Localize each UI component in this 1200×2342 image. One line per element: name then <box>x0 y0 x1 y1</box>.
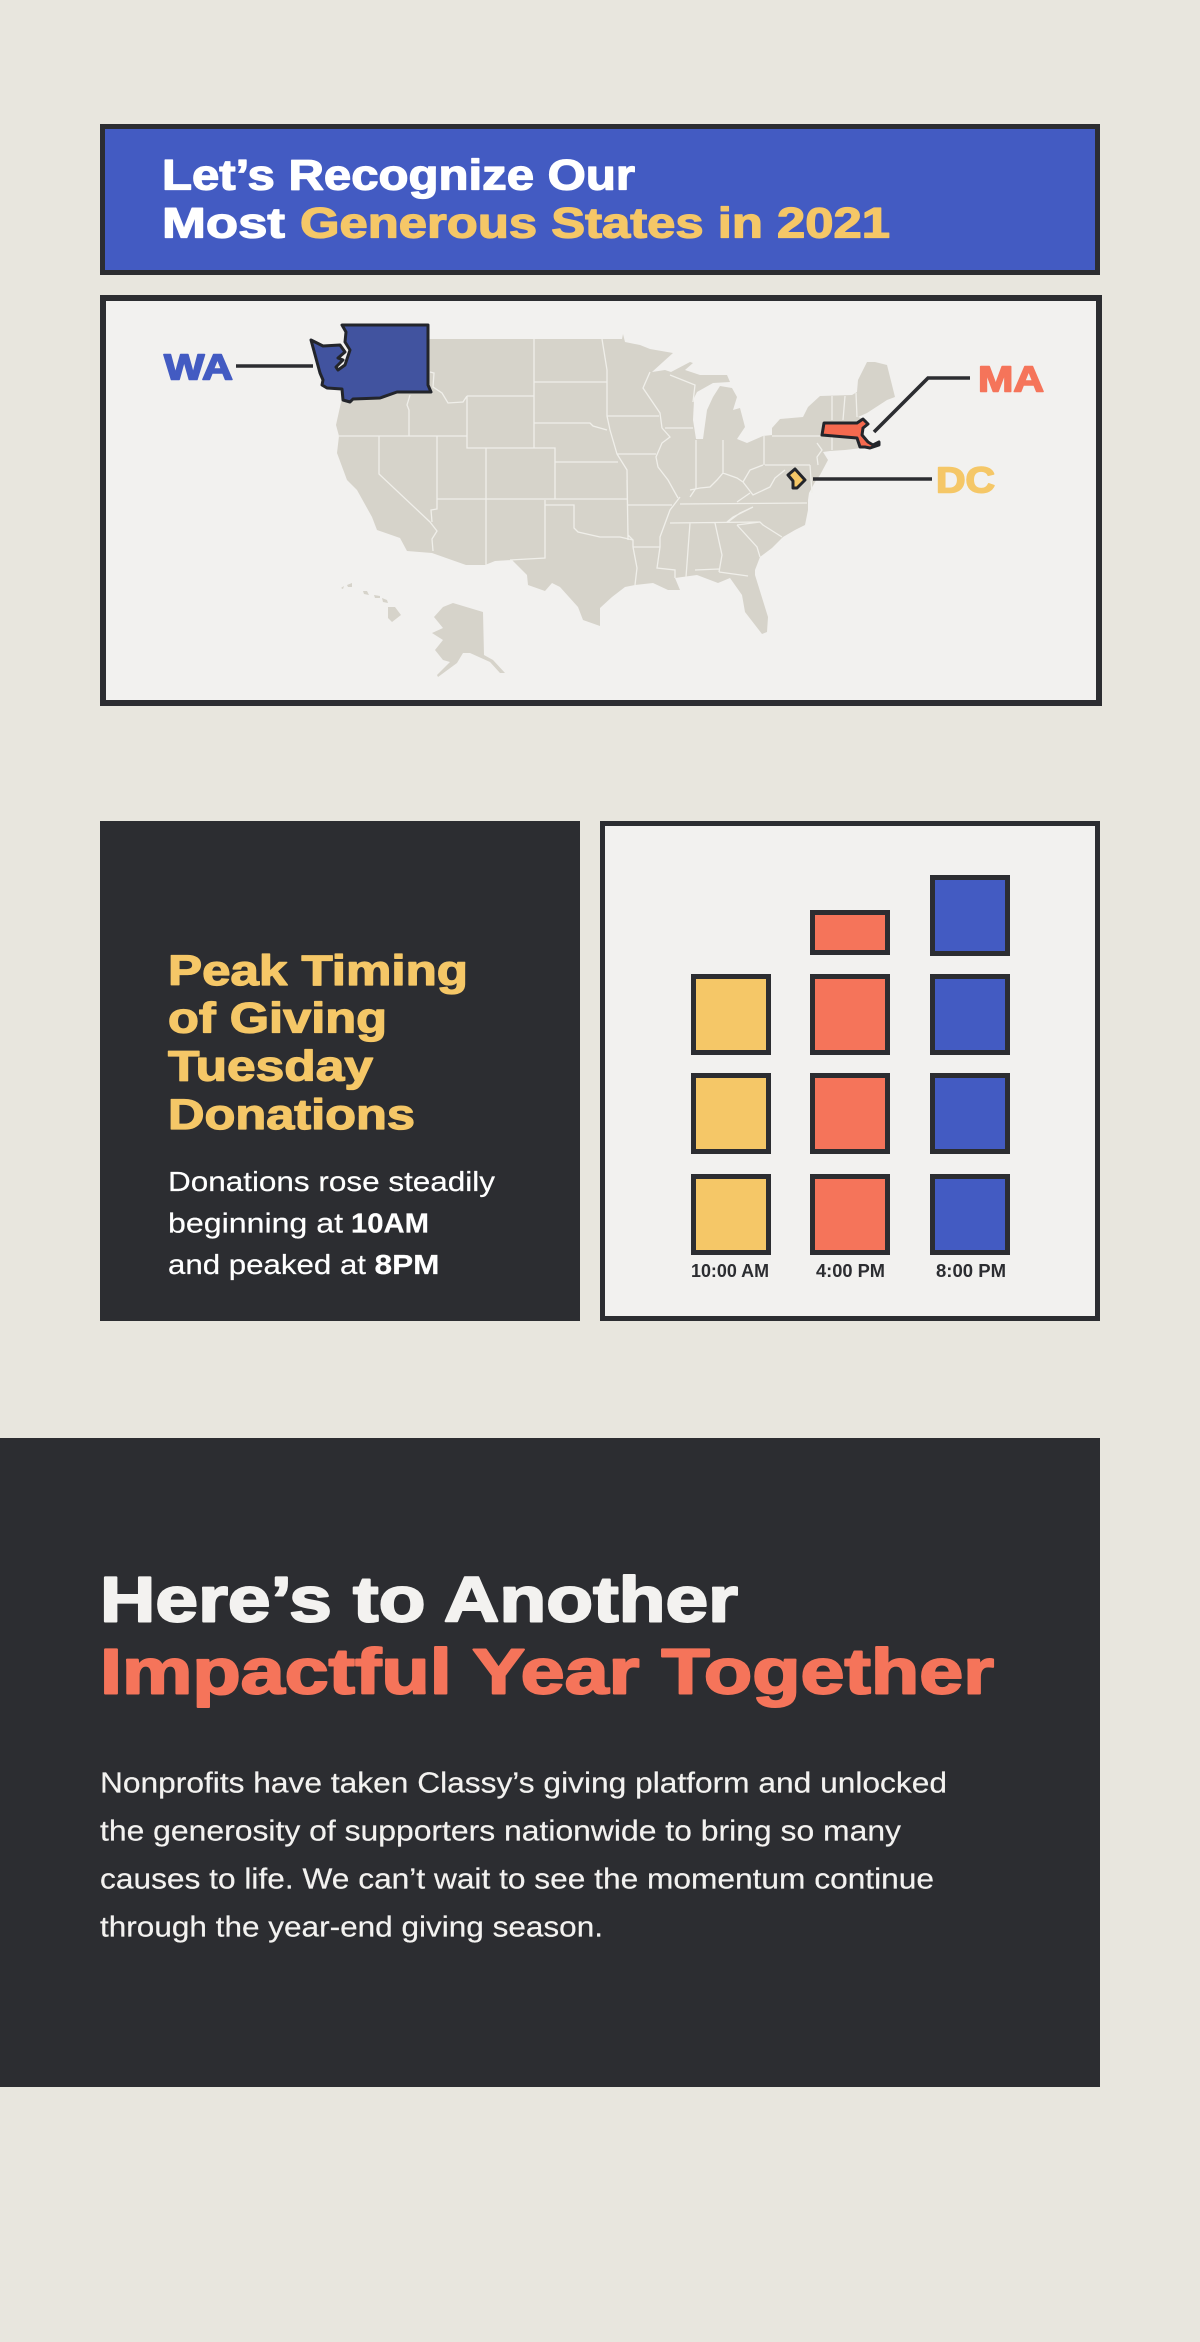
axis labels <box>691 1261 1006 1281</box>
map: contiguous United States <box>336 334 895 634</box>
text block: donation timing <box>168 1166 495 1280</box>
heading: closing: Here’s to Another <box>100 1564 738 1636</box>
callout: MA: MA <box>978 358 1044 400</box>
map: Alaska <box>432 603 505 677</box>
text block: donation timing: 10AM <box>351 1208 429 1238</box>
map: Hawaii <box>341 583 401 622</box>
map: state borders <box>338 339 857 585</box>
callout: WA: WA <box>164 346 233 388</box>
title: Generous States in 2021 <box>300 200 890 248</box>
heading: peak timing <box>168 947 468 1139</box>
heading: peak timing: of Giving <box>168 994 387 1042</box>
heading: peak timing: Peak Timing <box>168 947 468 995</box>
title: Let’s Recognize Our <box>162 152 635 200</box>
panel: bar chart <box>602 824 1098 1318</box>
heading: closing <box>100 1564 994 1708</box>
bar: 10:00 AM <box>694 976 768 1252</box>
text block: closing body: the generosity of supporters nationwide to bring so many <box>100 1816 902 1848</box>
title <box>162 152 890 248</box>
axis labels: 10:00 AM <box>691 1261 769 1281</box>
heading: peak timing: Donations <box>168 1091 415 1139</box>
bar: 4:00 PM <box>812 912 888 1252</box>
text block: closing body: causes to life. We can’t wait to see the momentum continue <box>100 1864 934 1896</box>
heading: closing: Impactful Year Together <box>100 1636 994 1708</box>
bar: 8:00 PM <box>932 878 1008 1252</box>
panel: closing message <box>0 1438 1100 2087</box>
callout: DC: DC <box>936 460 995 500</box>
highlighted state: District of Columbia <box>788 469 805 488</box>
panel: US map <box>103 298 1099 703</box>
text block: closing body: Nonprofits have taken Classy’s giving platform and unlocked <box>100 1768 947 1800</box>
text block: closing body <box>100 1768 947 1944</box>
panel: title banner <box>102 126 1098 272</box>
text block: donation timing: beginning at <box>168 1208 343 1238</box>
panel: peak timing text <box>100 821 580 1321</box>
heading: peak timing: Tuesday <box>168 1042 373 1090</box>
highlighted state: Massachusetts <box>822 419 879 448</box>
callout: MA <box>874 358 1044 432</box>
text block: donation timing: and peaked at <box>168 1249 366 1280</box>
axis labels: 8:00 PM <box>936 1261 1006 1281</box>
text block: donation timing: 8PM <box>374 1249 440 1280</box>
text block: closing body: through the year-end giving season. <box>100 1912 603 1944</box>
axis labels: 4:00 PM <box>816 1261 885 1281</box>
text block: donation timing: Donations rose steadily <box>168 1166 495 1197</box>
highlighted state: Washington <box>311 325 431 402</box>
title: Most <box>162 200 285 248</box>
